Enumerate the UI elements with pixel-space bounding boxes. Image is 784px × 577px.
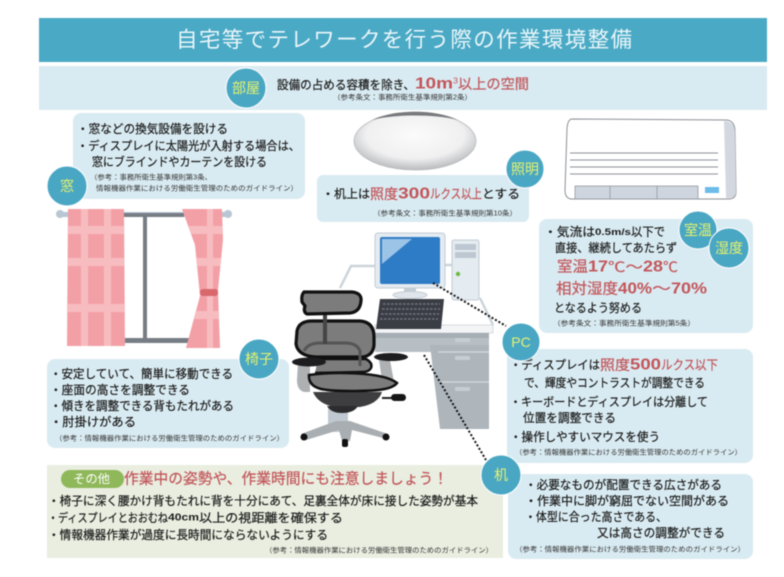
panel: lighting: ・机上は: [322, 187, 370, 201]
keyboard: [376, 299, 444, 329]
panel: temperature and humidity: ℃: [663, 259, 678, 275]
panel: window: ・窓などの換気設備を設ける: [77, 121, 228, 136]
panel: chair: ・肘掛けがある: [50, 414, 136, 429]
badge: humidity: 湿度: [715, 240, 743, 256]
badge: lighting: 照明: [511, 161, 539, 177]
panel: desk: 又は高さの調整ができる: [597, 525, 725, 540]
badge: chair: 椅子: [245, 351, 273, 367]
badge: room: 部屋: [232, 80, 260, 96]
panel: lighting: 照度: [370, 186, 398, 202]
room requirement: 設備の占める容積を除き、: [277, 77, 415, 92]
panel: temperature and humidity: 0.5m/s: [595, 227, 631, 237]
panel: lighting: ルクス以上: [430, 186, 482, 202]
panel: chair: ・傾きを調整できる背もたれがある: [50, 398, 234, 413]
badge: PC: [502, 323, 540, 361]
leader line: monitor to PC: [433, 283, 506, 326]
badge: humidity: [709, 228, 749, 268]
panel: temperature and humidity: となるよう努める: [554, 300, 642, 315]
room requirement: 10m: [415, 76, 453, 92]
panel: PC: 位置を調整できる: [523, 411, 616, 425]
tag: other: [61, 470, 124, 488]
panel: chair: [47, 339, 289, 448]
badge: chair: [239, 339, 279, 379]
panel: chair: ・安定していて、簡単に移動できる: [50, 366, 233, 381]
panel: other notes: 40cm: [168, 512, 199, 524]
panel: temperature and humidity: ℃～: [608, 259, 643, 275]
panel: other notes: 以上の視距離を確保する: [199, 510, 343, 525]
panel: desk: [481, 455, 753, 559]
icon: curtain window: [56, 208, 232, 350]
panel: PC: ルクス以下: [661, 358, 718, 372]
panel: window: [47, 113, 305, 206]
panel: window: ・ディスプレイに太陽光が入射する場合は、: [77, 138, 300, 153]
illustration: desk and computer: [292, 233, 493, 447]
panel: lighting: とする: [482, 187, 520, 201]
panel: lighting: [317, 150, 544, 222]
cable and desk surface: [340, 265, 493, 325]
room requirement: 3: [453, 76, 459, 86]
room reference: （参考条文：事務所衛生基準規則第2条）: [333, 92, 472, 102]
panel: temperature and humidity: 以下で: [631, 225, 665, 239]
panel: temperature and humidity: 直接、継続してあたらず: [555, 240, 677, 255]
badge: window: 窓: [60, 178, 74, 194]
panel: PC: ・キーボードとディスプレイは分離して: [510, 394, 708, 409]
panel: lighting: （参考条文：事務所衛生基準規則第10条）: [373, 208, 517, 218]
badge: desk: 机: [494, 467, 508, 483]
panel: other notes: ・ディスプレイとおおむね: [48, 510, 168, 525]
tag: other: その他: [73, 472, 110, 486]
panel: temperature and humidity: 70%: [671, 280, 707, 298]
panel: PC: ・操作しやすいマウスを使う: [510, 429, 660, 444]
panel: PC: 500: [630, 356, 661, 374]
badge: room: [226, 68, 266, 108]
badge: lighting: [506, 150, 544, 188]
panel: temperature and humidity: 17: [588, 258, 608, 276]
title banner: 自宅等でテレワークを行う際の作業環境整備: [176, 28, 632, 52]
panel: temperature and humidity: （参考条文：事務所衛生基準規則第5条）: [553, 318, 695, 328]
panel: room: [39, 66, 767, 110]
panel: PC: で、輝度やコントラストが調整できる: [524, 375, 705, 390]
panel: chair: （参考：情報機器作業における労働衛生管理のためのガイドライン）: [55, 434, 284, 442]
panel: PC: ・ディスプレイは: [510, 357, 600, 372]
title banner: [39, 18, 767, 62]
panel: PC: 照度: [600, 357, 630, 373]
computer tower: [452, 240, 479, 300]
badge: window: [47, 166, 87, 206]
badge: room temperature: 室温: [684, 222, 712, 238]
panel: temperature and humidity: 40%: [618, 280, 652, 298]
panel: temperature and humidity: 相対湿度: [556, 280, 618, 298]
badge: room temperature: [679, 211, 717, 249]
panel: PC: [502, 323, 753, 463]
monitor: [375, 233, 445, 298]
room requirement: 以上の空間: [458, 76, 529, 92]
panel: lighting: 300: [398, 186, 430, 202]
panel: window: 窓にブラインドやカーテンを設ける: [92, 154, 267, 169]
panel: PC: （参考：情報機器作業における労働衛生管理のためのガイドライン）: [515, 448, 742, 456]
office chair: [292, 292, 408, 447]
panel: temperature and humidity: [539, 211, 753, 333]
panel: other notes: [47, 465, 503, 558]
leader line: desk: [424, 355, 486, 460]
panel: other notes: ・情報機器作業が過度に長時間にならないようにする: [48, 527, 328, 542]
panel: temperature and humidity: ～: [652, 280, 671, 298]
panel: desk: （参考：情報機器作業における労働衛生管理のためのガイドライン）: [515, 544, 745, 554]
panel: desk: ・体型に合った高さである、: [525, 510, 667, 524]
panel: temperature and humidity: 室温: [557, 258, 588, 276]
badge: PC: PC: [511, 334, 531, 350]
panel: window: 情報機器作業における労働衛生管理のためのガイドライン）: [96, 184, 298, 192]
panel: window: （参考：事務所衛生基準規則第3条、: [90, 172, 212, 182]
panel: chair: ・座面の高さを調整できる: [50, 383, 190, 397]
panel: temperature and humidity: ・気流は: [544, 224, 595, 239]
icon: air conditioner: [565, 119, 736, 199]
panel: temperature and humidity: 28: [643, 258, 663, 276]
heading: posture and working hours: 作業中の姿勢や、作業時間にも注意しましょう！: [124, 470, 448, 488]
desk body: [375, 333, 489, 429]
panel: desk: ・作業中に脚が窮屈でない空間がある: [525, 493, 729, 508]
panel: other notes: ・椅子に深く腰かけ背もたれに背を十分にあて、足裏全体が床に接した姿勢が基本: [48, 493, 478, 508]
panel: desk: ・必要なものが配置できる広さがある: [525, 477, 722, 492]
panel: other notes: （参考：情報機器作業における労働衛生管理のためのガイドライン）: [265, 546, 493, 554]
badge: desk: [481, 455, 521, 495]
room requirement: [277, 76, 529, 92]
icon: ceiling light: [354, 112, 476, 170]
